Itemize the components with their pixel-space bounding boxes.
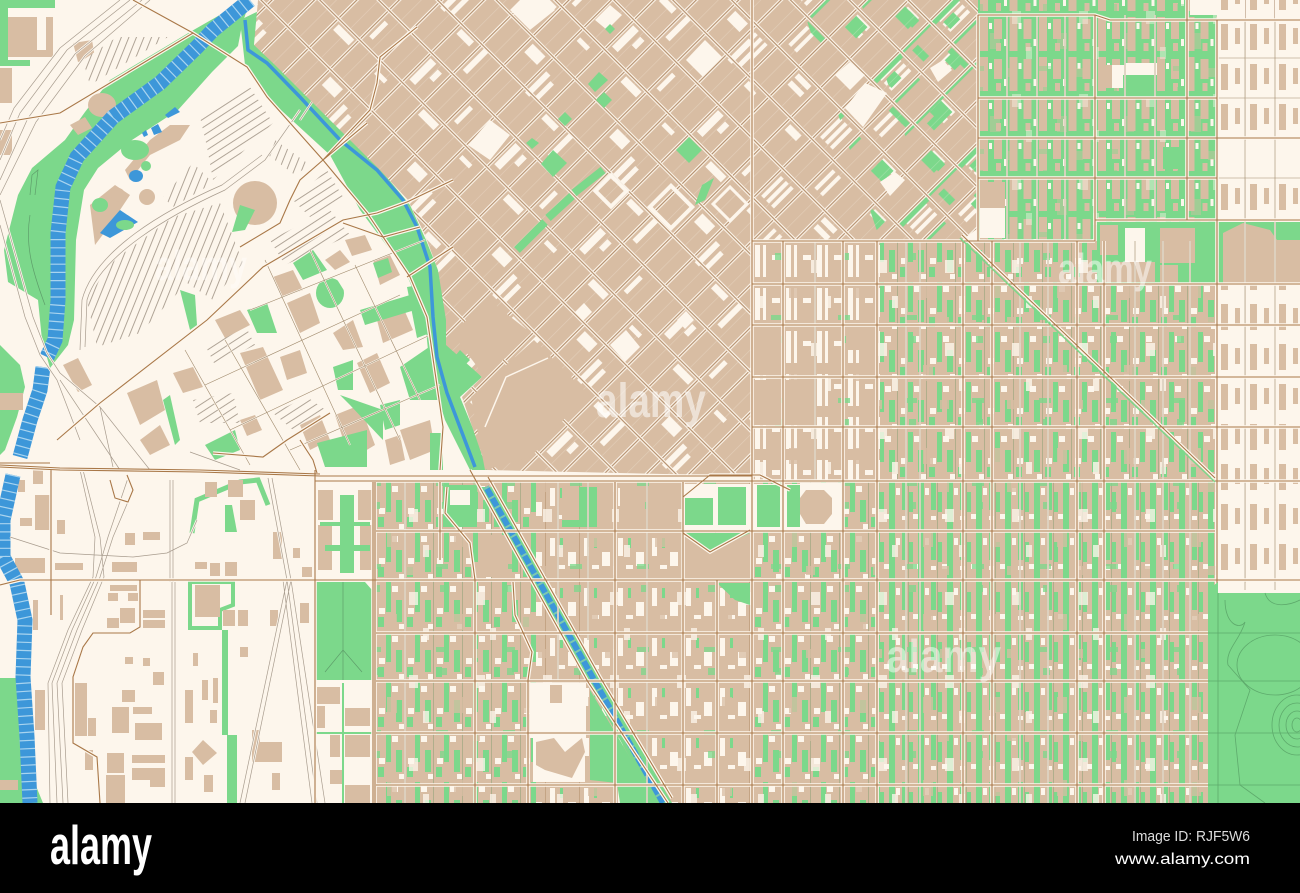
downtown white lots bbox=[468, 0, 952, 362]
watermark: alamy south-east: alamy bbox=[886, 630, 1001, 682]
arena circle bbox=[233, 181, 277, 225]
northwest blocks bbox=[0, 10, 116, 410]
city park with contour lines bbox=[1208, 582, 1300, 803]
park contour details bbox=[28, 170, 362, 680]
civic center park bbox=[683, 483, 843, 605]
campus block east bbox=[980, 63, 1300, 285]
green parks bbox=[0, 0, 922, 803]
large downtown blocks bbox=[452, 300, 587, 470]
campus empty lot bbox=[333, 263, 373, 300]
amusement park and ponds bbox=[90, 107, 190, 245]
residential blocks bbox=[376, 0, 1300, 803]
website: www.alamy.com bbox=[1114, 851, 1250, 868]
footer logo: alamy bbox=[50, 814, 152, 876]
campus buildings bbox=[127, 235, 435, 465]
campus green areas bbox=[163, 205, 443, 470]
blocks along creek south bbox=[443, 485, 678, 782]
watermark: alamy centre: alamy bbox=[596, 375, 706, 428]
main river bbox=[3, 0, 250, 803]
image id: Image ID: RJF5W6 bbox=[1132, 828, 1250, 845]
cherry creek bbox=[245, 20, 663, 803]
south-central blocks beside park bbox=[316, 484, 372, 803]
south-west industrial buildings bbox=[0, 470, 312, 803]
highways and rail lines bbox=[0, 0, 380, 803]
footer bar bbox=[0, 803, 1300, 893]
watermark: alamy west: alamy bbox=[155, 242, 247, 289]
watermark: alamy north-east: alamy bbox=[1058, 245, 1153, 292]
parking lot hatching bbox=[83, 37, 350, 430]
downtown street grid bbox=[254, 0, 978, 476]
downtown green spaces bbox=[452, 24, 714, 370]
